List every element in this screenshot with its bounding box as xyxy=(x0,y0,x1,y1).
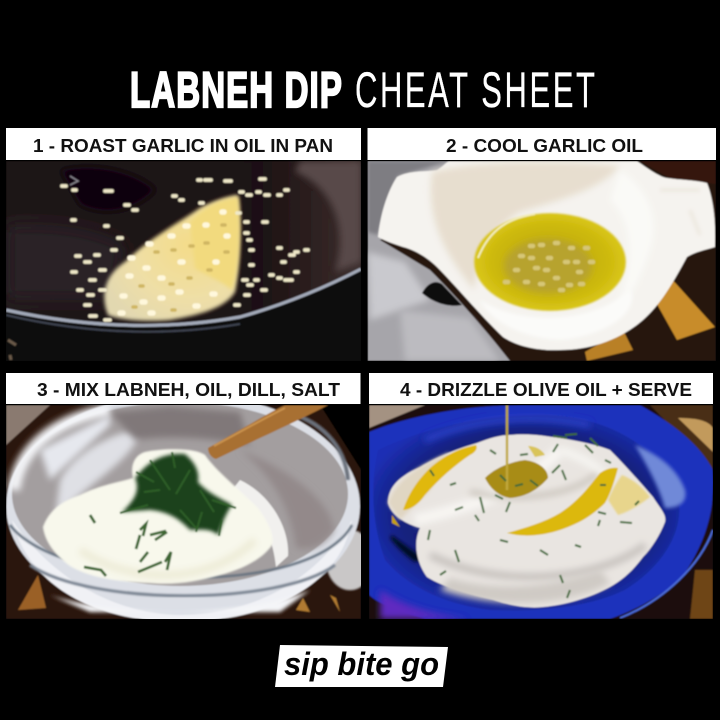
labneh xyxy=(43,449,273,584)
label: step 4 xyxy=(369,373,713,404)
logo: sip bite go: sip bite go xyxy=(284,646,439,682)
title: LABNEH DIP xyxy=(130,62,342,118)
dill xyxy=(84,452,236,576)
oil stream xyxy=(506,405,508,490)
oil xyxy=(474,213,626,311)
cloth corner xyxy=(326,530,361,592)
label: step 4: 4 - DRIZZLE OLIVE OIL + SERVE xyxy=(400,380,692,400)
bowl xyxy=(378,161,715,350)
panel 2: cool garlic oil xyxy=(368,128,716,361)
garlic mound xyxy=(104,195,240,321)
panel 1: roast garlic xyxy=(6,128,361,361)
bowl xyxy=(6,393,360,619)
dill flecks xyxy=(428,434,639,598)
labneh dip xyxy=(388,434,665,607)
photo: garlic in pan xyxy=(6,161,361,361)
cloth xyxy=(368,161,510,361)
oil pools xyxy=(403,445,477,510)
title: CHEAT SHEET xyxy=(355,61,595,118)
photo: bowl of garlic oil xyxy=(368,161,716,361)
panel 4: drizzle and serve xyxy=(369,373,713,619)
garlic in oil xyxy=(504,239,592,293)
label: step 3 xyxy=(6,373,360,404)
label: step 3: 3 - MIX LABNEH, OIL, DILL, SALT xyxy=(37,380,340,400)
panel 3: mix labneh xyxy=(6,373,374,622)
wooden spoon xyxy=(208,405,328,459)
plate xyxy=(369,405,713,619)
label: step 2: 2 - COOL GARLIC OIL xyxy=(446,136,643,156)
title xyxy=(130,61,595,118)
label: step 1: 1 - ROAST GARLIC IN OIL IN PAN xyxy=(33,136,333,156)
label: step 1 xyxy=(6,128,361,160)
label: step 2 xyxy=(368,128,716,160)
photo: blue plate with labneh dip xyxy=(369,405,713,619)
photo: glass bowl with labneh and dill xyxy=(6,393,374,622)
